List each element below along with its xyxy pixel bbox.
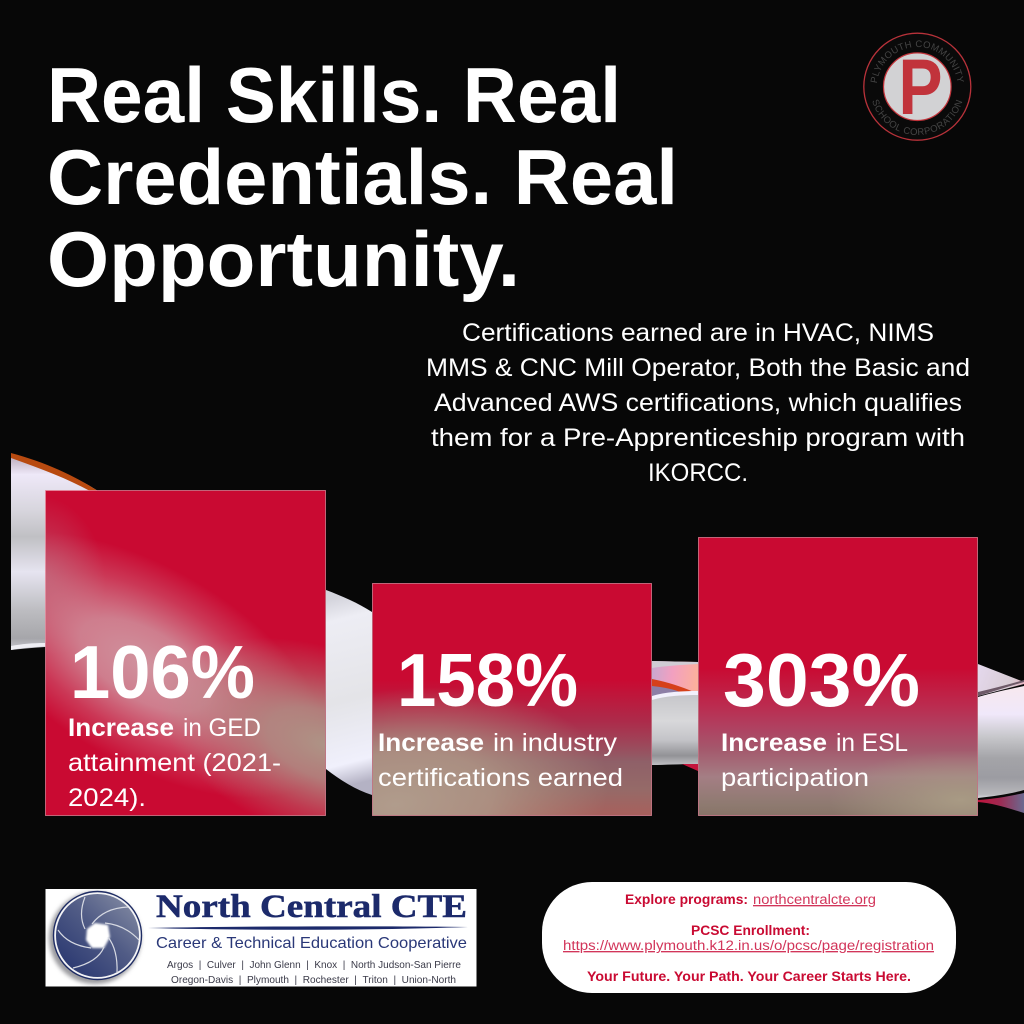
logo: North Central CTE: Career & Technical Education Cooperative	[156, 935, 467, 952]
title: Real Skills. Real	[47, 51, 621, 139]
ribbon: chrome wave behind the cards	[11, 453, 1024, 813]
title: Opportunity.	[47, 215, 520, 303]
panel: 158% stat card	[372, 584, 652, 816]
logo: Plymouth Community School Corporation seal	[863, 32, 972, 141]
panel: 303% stat card: in ESL	[836, 729, 908, 757]
logo: North Central CTE: North Central CTE	[156, 889, 467, 925]
panel: 106% stat card: 2024).	[68, 784, 146, 812]
description text block: IKORCC.	[648, 459, 748, 487]
description text block: Advanced AWS certifications, which qualifies	[434, 389, 962, 417]
panel: 106% stat card: attainment (2021-	[68, 749, 281, 777]
logo: Plymouth Community School Corporation seal: P	[898, 43, 942, 131]
logo: North Central CTE	[46, 889, 476, 986]
logo: Plymouth Community School Corporation seal: PLYMOUTH COMMUNITY	[870, 40, 964, 83]
callout: programs and enrollment links	[542, 882, 956, 993]
panel: 303% stat card	[698, 538, 978, 816]
panel: 158% stat card: certifications earned	[378, 764, 623, 792]
panel: 106% stat card: Increase	[68, 714, 174, 742]
title	[47, 51, 678, 303]
description text block: MMS & CNC Mill Operator, Both the Basic and	[426, 354, 970, 382]
panel: 303% stat card: participation	[721, 764, 869, 792]
logo: North Central CTE: Oregon-Davis | Plymouth | Rochester | Triton | Union-North	[171, 974, 456, 986]
panel: 303% stat card: 303%	[723, 638, 920, 722]
panel: 106% stat card: 106%	[70, 630, 255, 714]
callout: programs and enrollment links: Explore programs:	[625, 892, 748, 907]
panel: 158% stat card: Increase	[378, 729, 484, 757]
title: Credentials. Real	[47, 133, 678, 221]
panel: 158% stat card: 158%	[397, 638, 578, 722]
callout: programs and enrollment links: northcentralcte.org	[753, 892, 876, 907]
callout: programs and enrollment links: Your Future. Your Path. Your Career Starts Here.	[587, 969, 911, 984]
description text block: Certifications earned are in HVAC, NIMS	[462, 319, 934, 347]
panel: 158% stat card: in industry	[493, 729, 618, 757]
logo: Plymouth Community School Corporation seal: SCHOOL CORPORATION	[872, 100, 962, 135]
logo: North Central CTE: Argos | Culver | John Glenn | Knox | North Judson-San Pierre	[167, 959, 461, 971]
description text block	[426, 319, 970, 487]
panel: 106% stat card: in GED	[183, 714, 261, 742]
panel: 303% stat card: Increase	[721, 729, 827, 757]
panel: 106% stat card	[46, 490, 326, 816]
callout: programs and enrollment links: PCSC Enrollment:	[691, 923, 810, 938]
callout: programs and enrollment links: https://www.plymouth.k12.in.us/o/pcsc/page/registration	[563, 938, 934, 953]
description text block: them for a Pre-Apprenticeship program with	[431, 424, 965, 452]
